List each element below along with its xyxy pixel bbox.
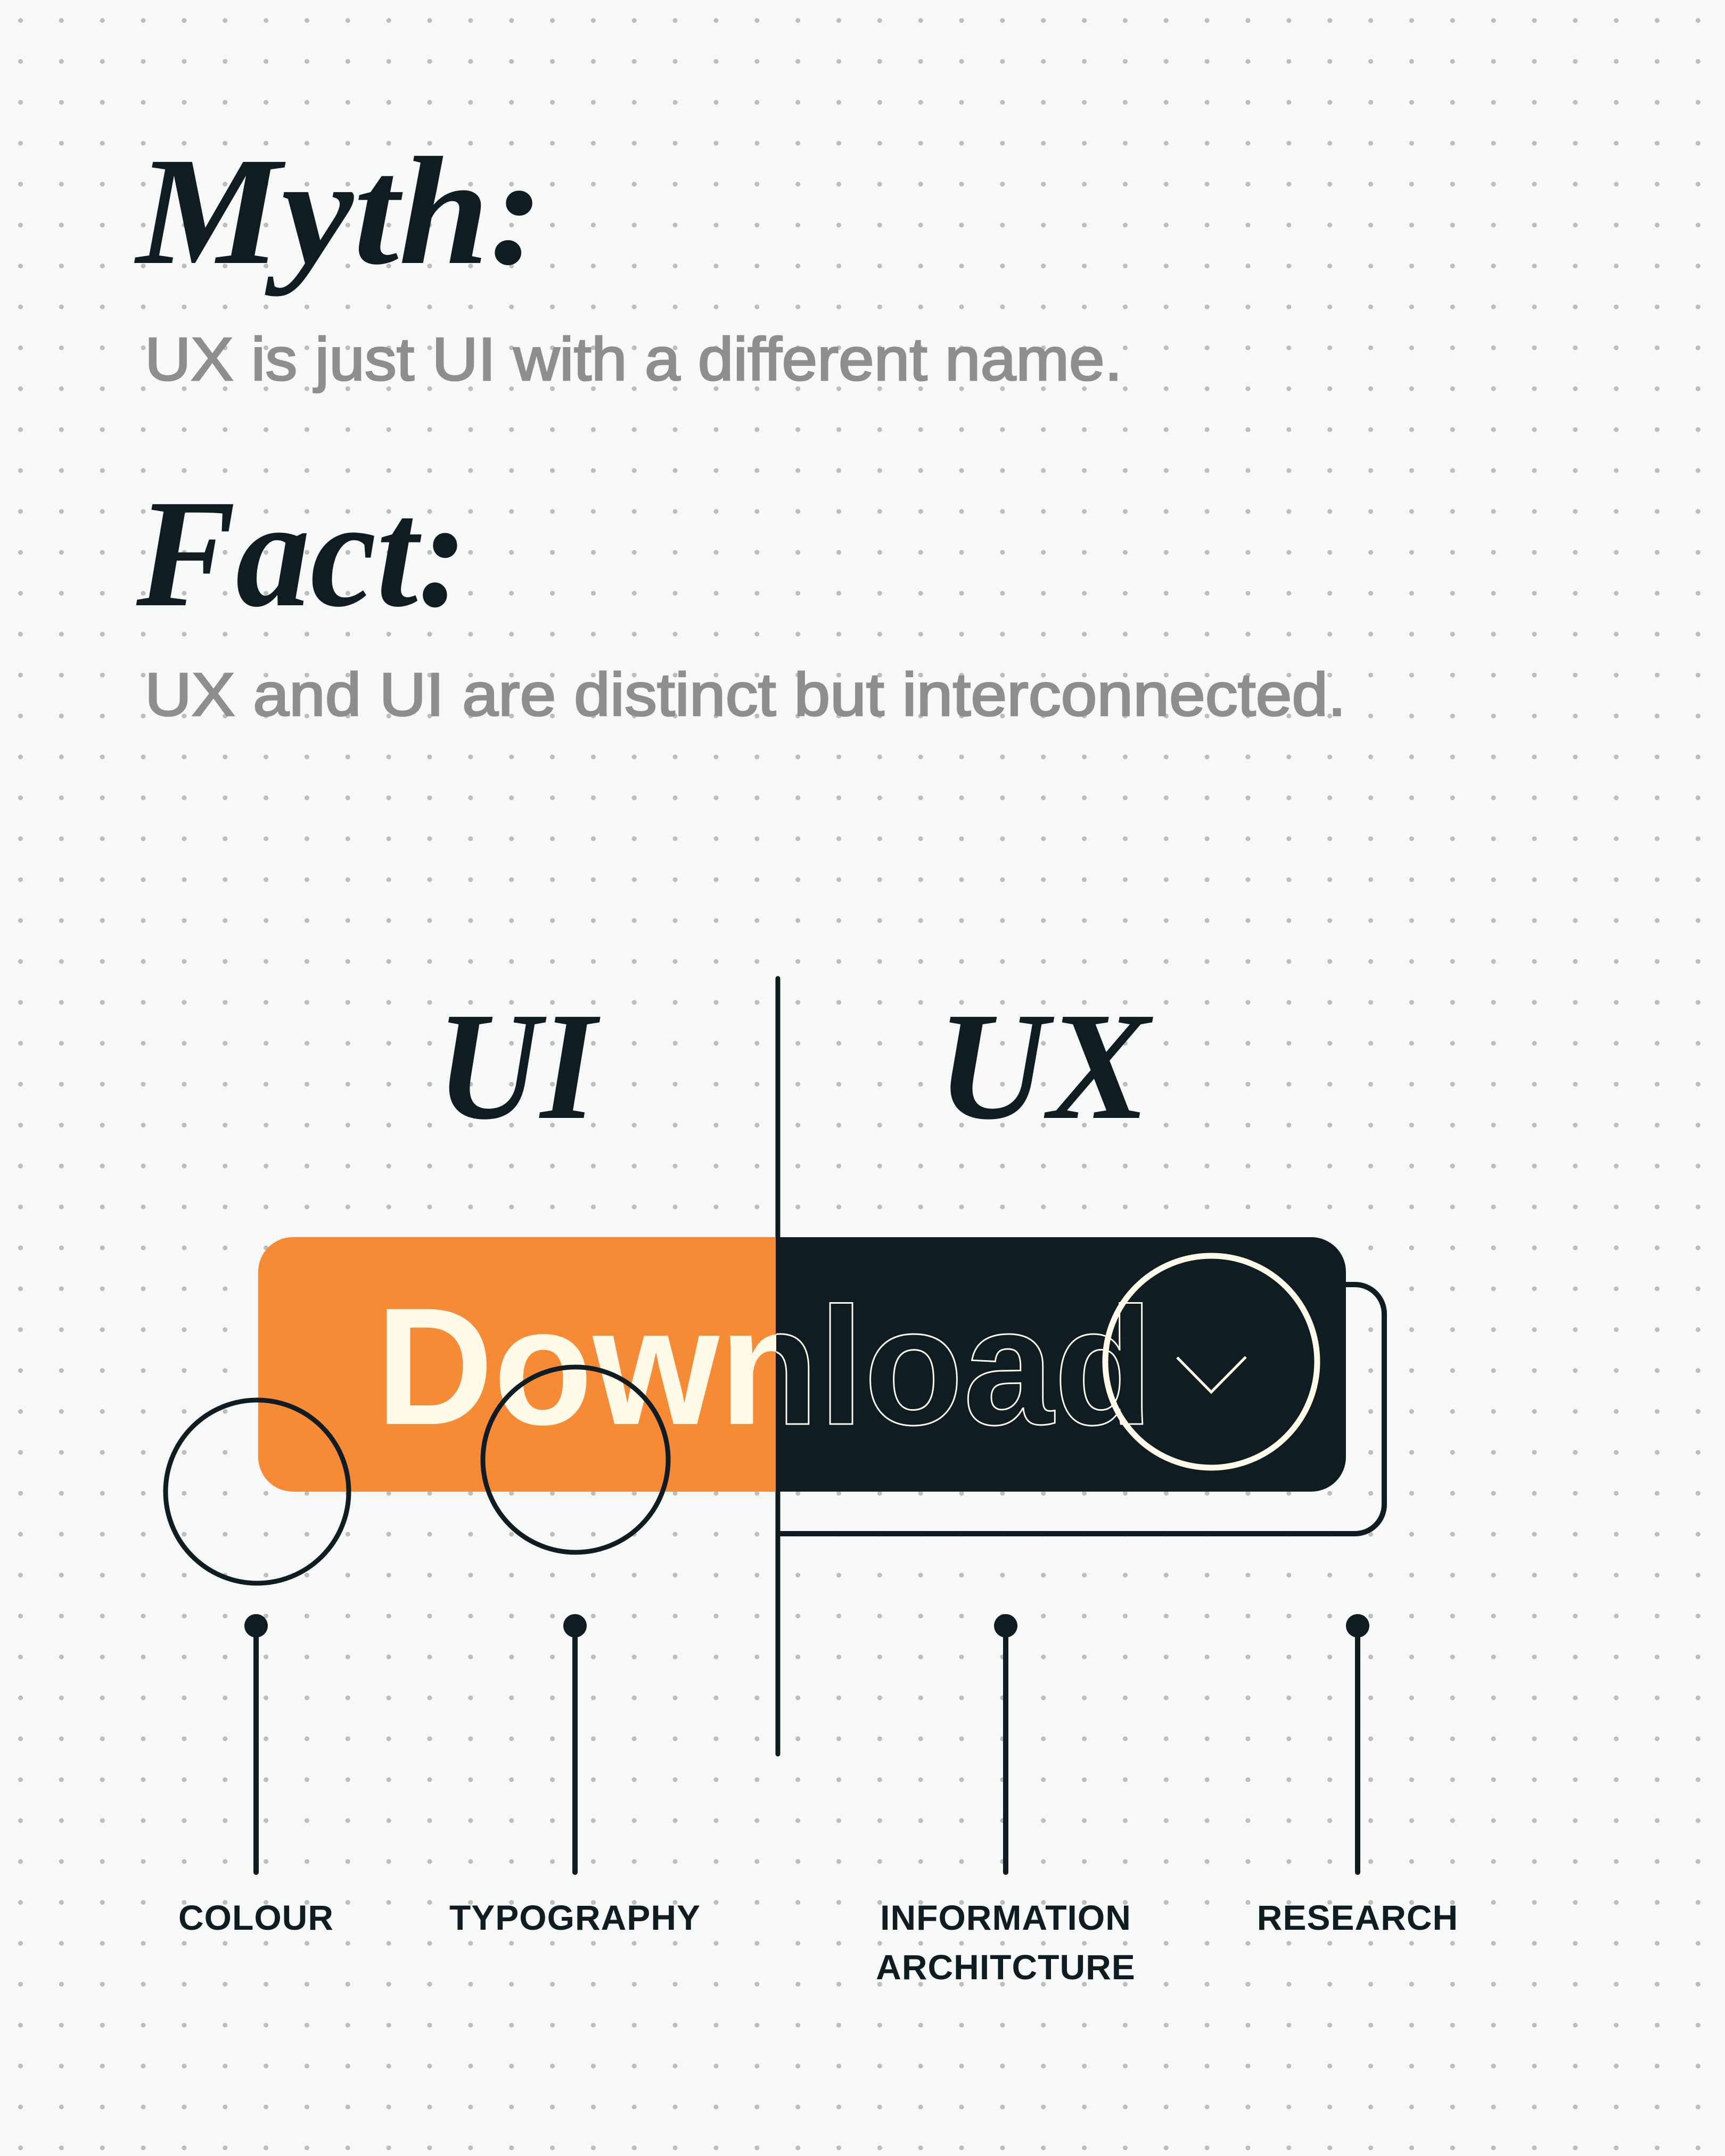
label: research: RESEARCH (1257, 1898, 1458, 1937)
highlight circle: typography (483, 1367, 668, 1552)
divider line (775, 978, 781, 1754)
icon: chevron (1177, 1357, 1246, 1392)
text: fact statement: UX and UI are distinct but interconnected. (145, 661, 1346, 729)
button: orange UI half (258, 1237, 778, 1492)
pin: colour (244, 1614, 268, 1872)
outline frame behind button (778, 1285, 1384, 1534)
heading: Myth: Myth: (134, 126, 544, 297)
heading: Fact: Fact: (134, 468, 467, 639)
button label filled: Download (376, 1273, 1153, 1460)
pin: research (1346, 1614, 1369, 1872)
label: information architecture: ARCHITCTURE (876, 1947, 1136, 1987)
label: typography: TYPOGRAPHY (449, 1898, 701, 1937)
label: colour: COLOUR (178, 1898, 334, 1937)
heading: UX: UX (937, 981, 1153, 1151)
label: information architecture: INFORMATION (880, 1898, 1131, 1937)
pin: information architecture (994, 1614, 1017, 1872)
button label outlined: Download (376, 1273, 1153, 1460)
highlight circle: colour (166, 1400, 349, 1583)
pin: typography (563, 1614, 587, 1872)
download button (258, 1237, 1346, 1492)
icon: dropdown circle (1105, 1256, 1317, 1468)
heading: UI: UI (437, 981, 601, 1151)
button: dark UX half (776, 1237, 1346, 1492)
text: myth statement: UX is just UI with a different name. (145, 326, 1122, 393)
